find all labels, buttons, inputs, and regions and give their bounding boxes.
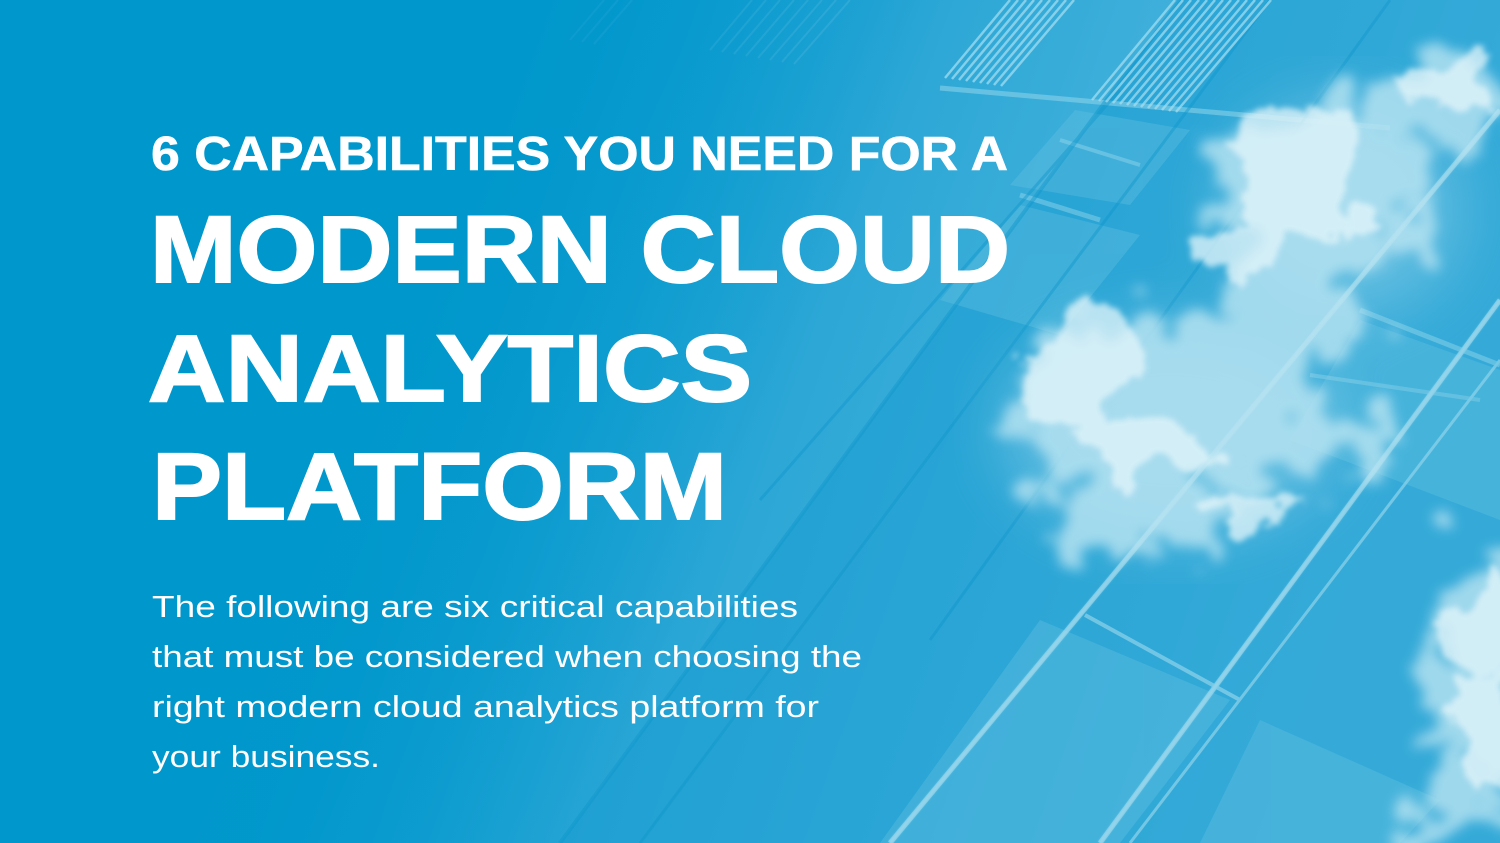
text block: introduction paragraph: right modern cloud analytics platform for (152, 689, 819, 724)
illustration: white clouds (890, 60, 1500, 843)
title: main heading: PLATFORM (152, 434, 727, 540)
title: main heading: MODERN CLOUD (150, 197, 1010, 303)
title: kicker line: 6 CAPABILITIES YOU NEED FOR A (151, 128, 1008, 181)
text block: introduction paragraph: your business. (152, 739, 380, 774)
background: mullions seen through clouds (890, 110, 1500, 843)
title: main heading (148, 197, 1010, 540)
title: main heading: ANALYTICS (148, 316, 752, 422)
text block: introduction paragraph (152, 589, 862, 774)
text block: introduction paragraph: The following are six critical capabilities (152, 589, 798, 624)
background: building facade with diagonal mullions (560, 0, 1500, 843)
background: louvre vents along the top (945, 0, 1271, 112)
text block: introduction paragraph: that must be considered when choosing the (152, 639, 862, 674)
